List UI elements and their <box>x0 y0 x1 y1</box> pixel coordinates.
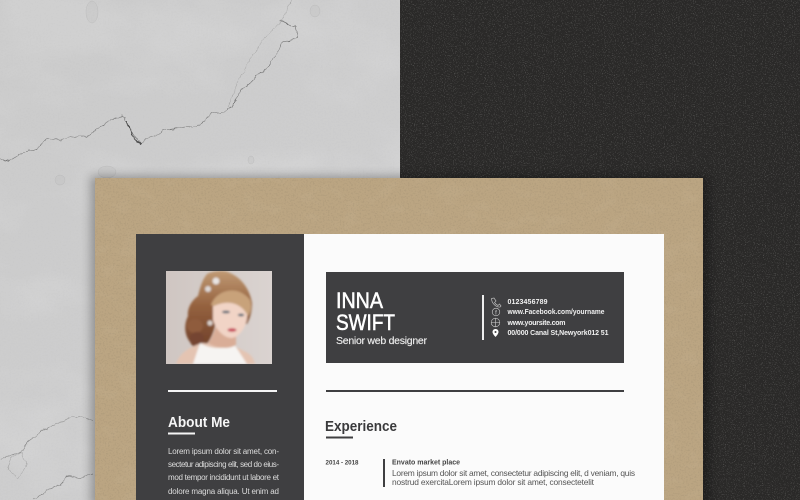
contact details: www.Facebook.com/yourname <box>507 309 605 316</box>
entry title: Envato market place <box>392 460 460 466</box>
name <box>336 288 395 335</box>
dates: 2014 - 2018 <box>326 460 359 466</box>
icon: facebook <box>492 308 500 316</box>
contact divider <box>482 295 484 340</box>
face <box>213 299 247 338</box>
main divider <box>326 390 624 392</box>
heading underline <box>168 432 195 434</box>
curls <box>188 322 202 333</box>
sidebar panel <box>136 234 304 500</box>
kraft board shadow <box>91 176 709 500</box>
name: SWIFT <box>336 310 395 335</box>
contact details: www.yoursite.com <box>506 320 566 327</box>
earring <box>207 320 213 326</box>
entry description <box>392 468 635 487</box>
about text: mod tempor incididunt ut labore et <box>168 473 280 482</box>
about text: dolore magna aliqua. Ut enim ad <box>168 487 279 496</box>
heading: About Me: About Me <box>168 415 230 431</box>
name: INNA <box>336 288 383 313</box>
contact details: 00/000 Canal St,Newyork012 51 <box>508 330 609 337</box>
about text <box>168 447 280 496</box>
entry description: Lorem ipsum dolor sit amet, consectetur adipiscing elit, d veniam, quis <box>392 468 635 478</box>
background: dark textured paper <box>400 0 800 500</box>
heading: Experience: Experience <box>325 418 397 435</box>
hair sweep <box>211 291 251 316</box>
sidebar divider <box>168 390 277 392</box>
icon: phone <box>492 298 501 307</box>
marble spots <box>55 1 320 185</box>
hair jewel <box>212 278 220 284</box>
icon: facebook: f <box>495 310 497 316</box>
about text: sectetur adipiscing elit, sed do eius- <box>168 460 279 469</box>
about text: Lorem ipsum dolor sit amet, con- <box>168 447 279 456</box>
entry description: nostrud exercitaLorem ipsum dolor sit amet, consectetelit <box>392 477 595 487</box>
entry divider <box>383 459 385 487</box>
kraft board <box>95 178 703 500</box>
header banner <box>326 272 624 363</box>
marble cracks <box>0 0 297 500</box>
hair mass <box>185 271 252 348</box>
dress <box>193 343 247 364</box>
icon: location pin <box>492 329 498 337</box>
portrait photo <box>166 271 272 364</box>
neck <box>208 326 236 348</box>
background: marble surface <box>0 0 400 500</box>
lips <box>228 328 236 332</box>
eyes <box>222 311 230 313</box>
icon: website globe <box>491 318 500 327</box>
job title: Senior web designer <box>336 335 428 347</box>
experience underline <box>326 436 353 438</box>
resume sheet <box>136 234 664 500</box>
shoulders <box>176 343 255 364</box>
contact details <box>506 299 609 337</box>
contact details: 0123456789 <box>508 299 548 306</box>
experience entry <box>326 459 635 487</box>
